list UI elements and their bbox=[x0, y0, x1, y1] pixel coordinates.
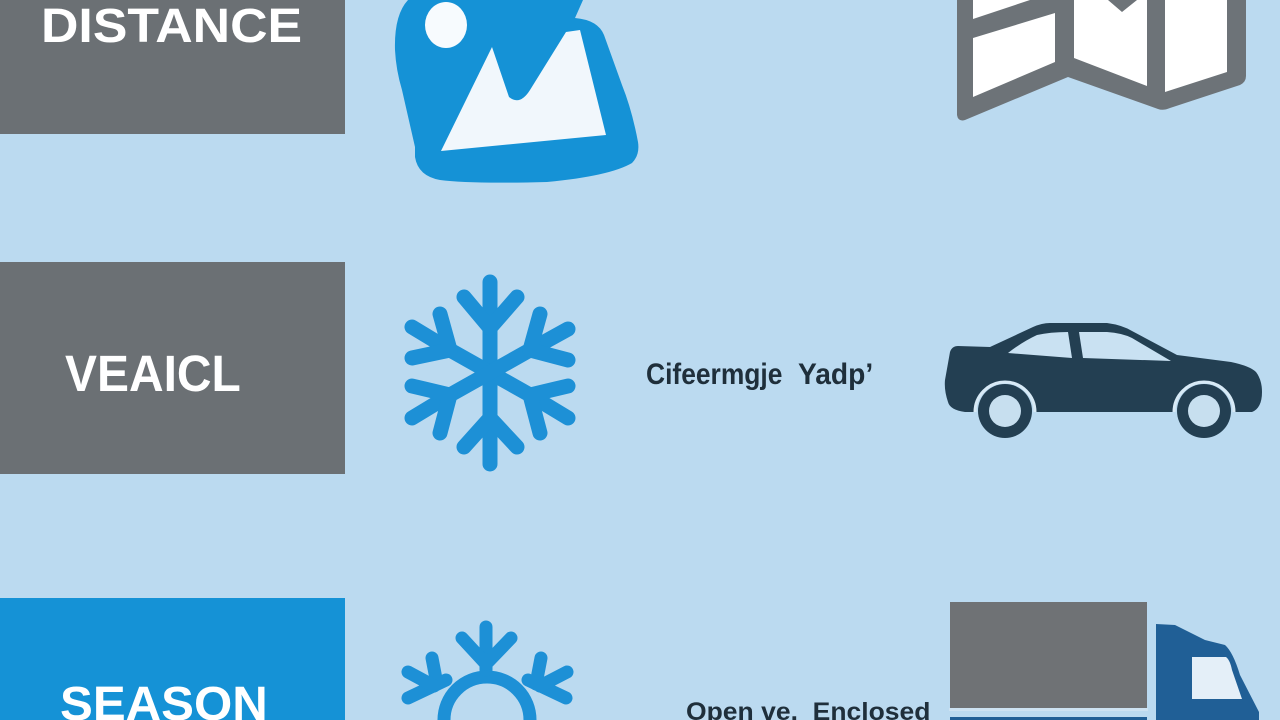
panel: distance label: DISTANCE bbox=[41, 0, 302, 53]
icon: snowflake bbox=[404, 274, 576, 472]
icon: car bbox=[944, 323, 1262, 438]
panel: vehicle label: VEAICL bbox=[65, 345, 241, 402]
icon: sun snowflake bbox=[402, 620, 574, 720]
panel: vehicle label bbox=[0, 262, 345, 474]
text: climate caption bbox=[646, 359, 873, 391]
icon: truck bbox=[949, 602, 1259, 720]
panel: season label bbox=[0, 598, 345, 720]
icon: map pin on landscape bbox=[394, 0, 638, 183]
icon: folded map bbox=[957, 0, 1246, 120]
panel: distance label bbox=[0, 0, 345, 134]
